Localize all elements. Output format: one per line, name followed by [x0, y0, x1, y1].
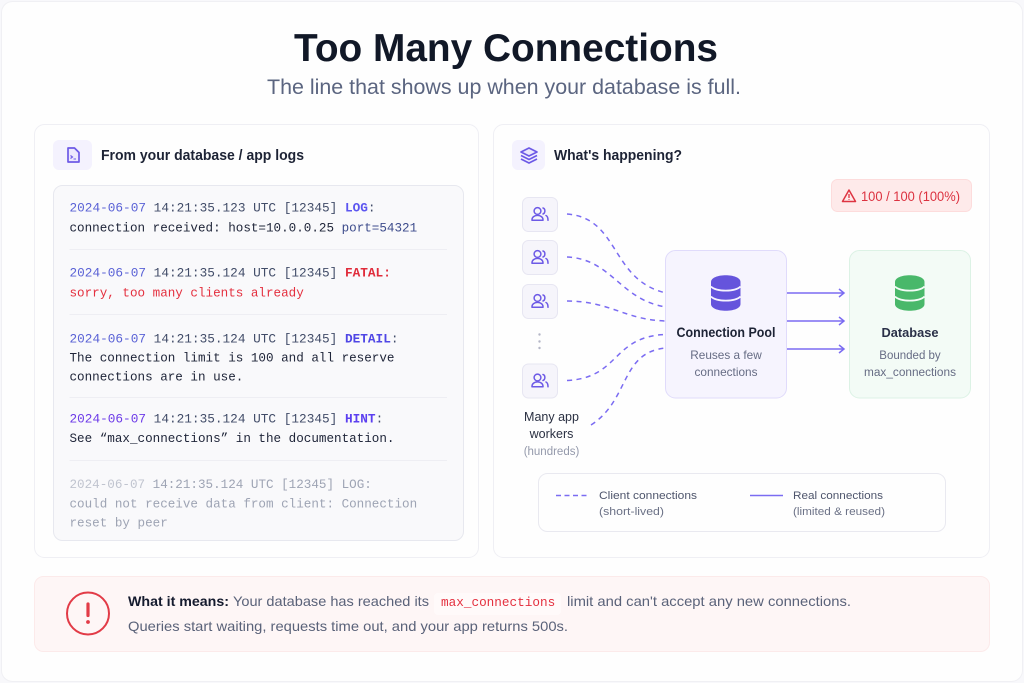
icon: alert circle — [67, 592, 109, 634]
heading: what's happening: What's happening? — [554, 148, 682, 164]
connection pool: connections — [695, 365, 758, 379]
ellipsis dots — [538, 333, 541, 349]
database — [850, 250, 970, 398]
legend: Client connections — [599, 490, 698, 502]
icon: pool database — [711, 275, 740, 311]
worker 1 — [522, 198, 558, 232]
legend: (limited & reused) — [793, 506, 885, 518]
client connections: dashed curves — [567, 214, 666, 425]
callout text: Queries start waiting, requests time out, and your app returns 500s. — [128, 618, 568, 634]
log entry: hint: See “max_connections” in the documentation. — [70, 432, 394, 446]
log entry: hint — [70, 411, 394, 446]
connection pool: Reuses a few — [690, 348, 762, 362]
log entry: fatal: sorry, too many clients already — [70, 286, 304, 300]
title: Too Many Connections — [294, 27, 718, 70]
log entry: fatal: 2024-06-07 14:21:35.124 UTC [12345] FATAL: — [70, 265, 391, 280]
log entry: connection received: 2024-06-07 14:21:35.123 UTC [12345] LOG: — [70, 200, 376, 215]
database: max_connections — [864, 367, 956, 379]
log entry: reset: reset by peer — [70, 516, 168, 530]
callout: what it means — [34, 576, 990, 652]
callout text: max_connections — [441, 595, 555, 610]
log entry: reset: 2024-06-07 14:21:35.124 UTC [12345] LOG: — [70, 478, 372, 492]
capacity badge: 100 / 100 (100%) — [861, 189, 960, 204]
callout text — [128, 593, 851, 634]
log entry: detail: 2024-06-07 14:21:35.124 UTC [12345] DETAIL: — [70, 331, 399, 346]
log entry: detail: connections are in use. — [70, 370, 243, 384]
real connections: arrows — [787, 289, 844, 353]
icon: terminal file — [53, 140, 92, 170]
log entry: fatal — [70, 265, 391, 300]
capacity badge — [832, 180, 972, 212]
worker 3 — [522, 284, 558, 318]
legend — [538, 474, 946, 532]
callout text: limit and can't accept any new connections. — [567, 593, 851, 609]
icon: layers — [512, 140, 545, 170]
legend: Real connections — [793, 490, 884, 502]
connection pool — [666, 250, 786, 398]
callout text: What it means: — [128, 593, 229, 609]
worker 4 — [522, 364, 558, 398]
icon: green database — [895, 275, 924, 311]
log entry: reset — [70, 478, 417, 530]
heading: logs: From your database / app logs — [101, 148, 304, 164]
panel: what's happening — [494, 124, 990, 558]
log entry: connection received: connection received: host=10.0.0.25 port=54321 — [70, 221, 417, 235]
connection pool: Connection Pool — [676, 325, 776, 340]
log entry: hint: 2024-06-07 14:21:35.124 UTC [12345] HINT: — [70, 411, 383, 426]
log entry: reset: could not receive data from client: Connection — [70, 497, 417, 511]
database: Database — [882, 325, 938, 340]
workers label: workers — [529, 427, 573, 441]
workers label: Many app — [524, 410, 579, 424]
log entry: detail — [70, 331, 399, 384]
subtitle: The line that shows up when your database is full. — [267, 76, 741, 99]
callout text: Your database has reached its — [233, 593, 429, 609]
log entry: connection received — [70, 200, 417, 235]
legend: (short-lived) — [599, 506, 664, 518]
worker 2 — [522, 240, 558, 274]
panel: logs — [34, 124, 478, 558]
workers label: (hundreds) — [524, 446, 579, 458]
log box — [54, 186, 464, 540]
database: Bounded by — [879, 350, 941, 362]
workers label — [524, 410, 579, 458]
log entry: detail: The connection limit is 100 and all reserve — [70, 351, 394, 365]
